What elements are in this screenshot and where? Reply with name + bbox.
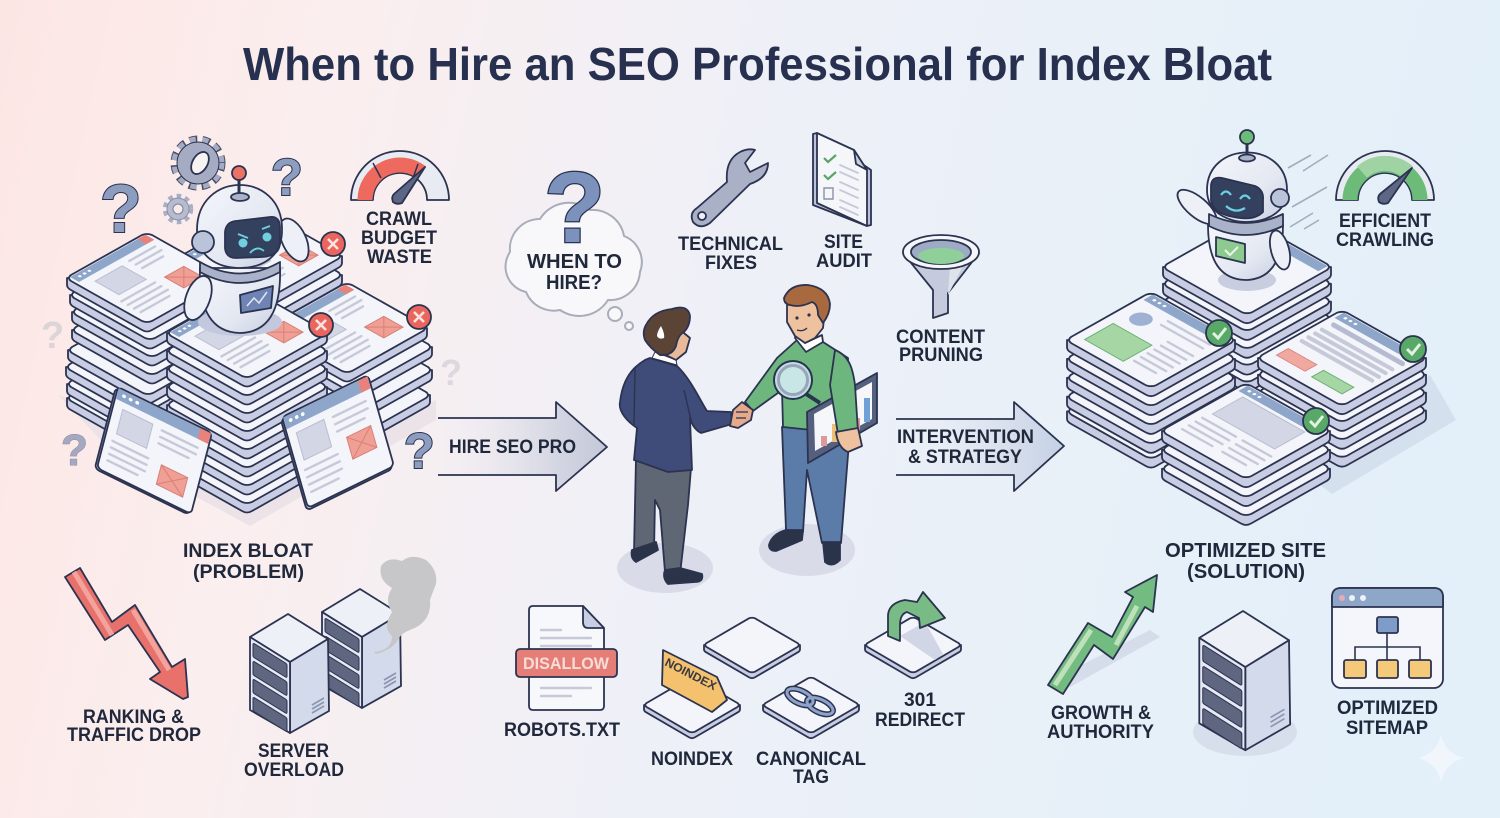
label: site audit: SITE bbox=[824, 232, 863, 253]
label: content pruning: CONTENT bbox=[896, 327, 985, 348]
label: ranking and traffic drop: RANKING & bbox=[83, 707, 184, 728]
label: optimized sitemap: OPTIMIZED bbox=[1337, 698, 1438, 719]
icon: question marks: ? bbox=[61, 426, 88, 475]
label: index bloat problem bbox=[183, 541, 313, 583]
label: technical fixes bbox=[678, 234, 783, 274]
label: canonical tag: CANONICAL bbox=[756, 749, 866, 770]
icon: question marks: ? bbox=[440, 352, 462, 393]
label: optimized sitemap: SITEMAP bbox=[1346, 718, 1428, 739]
pile: center stack bbox=[167, 289, 327, 512]
icon: tilted browser page left bbox=[95, 386, 212, 516]
arrow: intervention and strategy: & STRATEGY bbox=[908, 447, 1022, 468]
pile: left stack bbox=[66, 234, 232, 452]
arrow: intervention and strategy: INTERVENTION bbox=[897, 427, 1034, 448]
icon: canonical chain link on platform bbox=[763, 678, 859, 738]
label: 301 redirect bbox=[875, 690, 965, 731]
icon: tilted browser page right bbox=[280, 375, 395, 511]
icon: question marks: ? bbox=[100, 171, 142, 247]
label: 301 redirect: 301 bbox=[904, 690, 936, 711]
pile shadow bbox=[1300, 375, 1456, 494]
page pile shadow bbox=[58, 395, 436, 526]
label: ranking and traffic drop bbox=[67, 707, 201, 746]
icon: wrench bbox=[692, 149, 768, 226]
label: canonical tag bbox=[756, 749, 866, 788]
arrow: hire seo pro bbox=[438, 402, 607, 491]
icon: blank platform bbox=[704, 618, 800, 678]
icon: question marks: ? bbox=[41, 315, 64, 357]
icon: sparkle watermark bbox=[1418, 735, 1464, 782]
icon: robots.txt file: DISALLOW bbox=[523, 655, 609, 673]
label: index bloat problem: (PROBLEM) bbox=[193, 562, 304, 583]
icon: question marks bbox=[41, 149, 462, 479]
label: efficient crawling: EFFICIENT bbox=[1339, 211, 1431, 232]
figure: SEO professional with magnifier and tablet bbox=[730, 285, 877, 576]
label: optimized site solution bbox=[1165, 540, 1326, 583]
icon: green check badges bbox=[1206, 320, 1426, 434]
icon: overloaded servers with smoke bbox=[250, 557, 436, 733]
icon: robots.txt file bbox=[516, 606, 617, 710]
label: crawl budget waste: BUDGET bbox=[361, 228, 437, 249]
label: growth and authority bbox=[1047, 703, 1154, 743]
arrow: hire seo pro: HIRE SEO PRO bbox=[449, 437, 576, 458]
pile: right page stack bbox=[1258, 312, 1426, 467]
icon: green growth arrow bbox=[1048, 575, 1160, 694]
callout: when to hire thought bubble: WHEN TO bbox=[527, 251, 622, 273]
label: optimized site solution: (SOLUTION) bbox=[1187, 561, 1305, 583]
label: 301 redirect: REDIRECT bbox=[875, 710, 965, 731]
label: canonical tag: TAG bbox=[793, 767, 829, 788]
icon: noindex sign on platform: NOINDEX bbox=[663, 655, 719, 693]
label: robots.txt: ROBOTS.TXT bbox=[504, 720, 620, 741]
panel: optimized site solution bbox=[1067, 130, 1456, 525]
icon: healthy server bbox=[1193, 611, 1297, 756]
icon: optimized sitemap window bbox=[1332, 588, 1443, 688]
label: crawl budget waste: WASTE bbox=[367, 247, 432, 268]
label: optimized site solution: OPTIMIZED SITE bbox=[1165, 540, 1326, 562]
label: server overload: SERVER bbox=[258, 741, 329, 762]
label: technical fixes: TECHNICAL bbox=[678, 234, 783, 255]
icon: question marks: ? bbox=[271, 149, 303, 207]
label: efficient crawling bbox=[1336, 211, 1434, 251]
panel: index bloat problem bbox=[41, 140, 462, 526]
arrow: intervention and strategy bbox=[896, 402, 1064, 491]
callout: when to hire thought bubble: ? bbox=[544, 152, 605, 264]
icon: question marks: ? bbox=[404, 423, 435, 479]
label: site audit bbox=[816, 232, 872, 272]
label: server overload bbox=[244, 741, 344, 781]
label: index bloat problem: INDEX BLOAT bbox=[183, 541, 313, 562]
icon: error badges bbox=[309, 232, 431, 337]
label: ranking and traffic drop: TRAFFIC DROP bbox=[67, 725, 201, 746]
icon: confused robot bbox=[179, 166, 315, 336]
label: content pruning bbox=[896, 327, 985, 366]
pile: top stack bbox=[1163, 221, 1331, 408]
icon: crawl budget gauge bbox=[351, 151, 449, 204]
icon: funnel bbox=[903, 235, 979, 318]
label: crawl budget waste: CRAWL bbox=[366, 209, 432, 230]
icon: red downward arrow bbox=[65, 568, 188, 699]
label: crawl budget waste bbox=[361, 209, 437, 268]
title: When to Hire an SEO Professional for Index Bloat bbox=[243, 38, 1272, 90]
callout: when to hire thought bubble: HIRE? bbox=[546, 272, 602, 294]
pile: right stack bbox=[267, 284, 432, 448]
label: server overload: OVERLOAD bbox=[244, 760, 344, 781]
label: content pruning: PRUNING bbox=[899, 345, 983, 366]
pile: left page stack bbox=[1067, 294, 1235, 468]
pile: back right under robot bbox=[182, 212, 342, 346]
callout: when to hire thought bubble bbox=[506, 152, 642, 330]
icon: noindex sign on platform bbox=[644, 650, 740, 738]
label: site audit: AUDIT bbox=[816, 251, 872, 272]
label: noindex: NOINDEX bbox=[651, 749, 733, 770]
label: efficient crawling: CRAWLING bbox=[1336, 230, 1434, 251]
label: growth and authority: GROWTH & bbox=[1051, 703, 1151, 724]
label: technical fixes: FIXES bbox=[705, 253, 757, 274]
label: optimized sitemap bbox=[1337, 698, 1438, 739]
label: growth and authority: AUTHORITY bbox=[1047, 722, 1154, 743]
figure: site owner in suit bbox=[617, 308, 732, 593]
icon: 301 redirect arrow on platform bbox=[865, 592, 961, 678]
pile: front page stack bbox=[1162, 385, 1330, 525]
icon: gears bbox=[165, 140, 221, 222]
icon: happy robot bbox=[1172, 130, 1328, 291]
icon: audit document bbox=[813, 133, 871, 226]
icon: efficient crawling gauge bbox=[1336, 151, 1434, 204]
